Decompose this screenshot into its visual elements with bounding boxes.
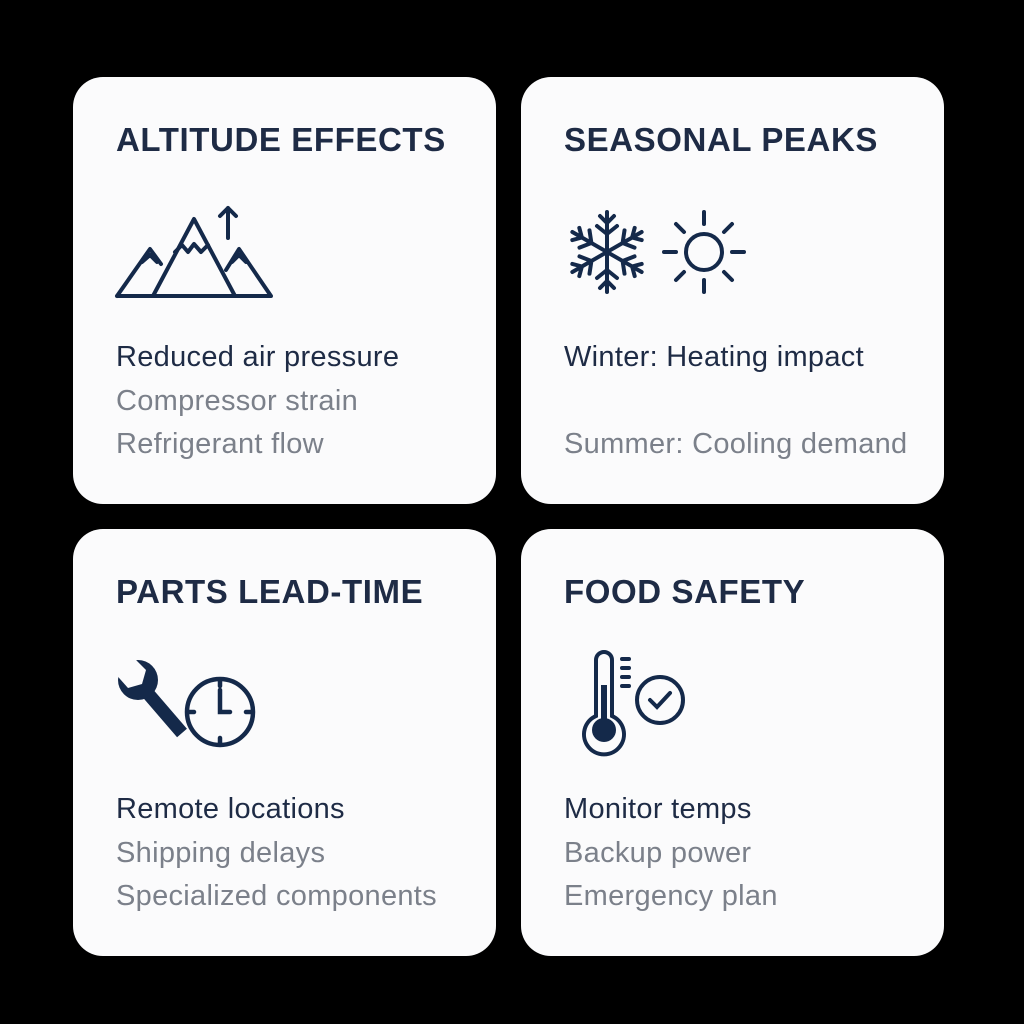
icon: wrench and clock — [118, 660, 256, 748]
panel: seasonal peaks — [521, 77, 944, 504]
panel: food safety: Emergency plan — [564, 880, 778, 912]
icon: snowflake and sun — [570, 210, 746, 294]
panel: parts lead-time: Specialized components — [116, 880, 437, 912]
heading: food: FOOD SAFETY — [564, 573, 805, 610]
panel: parts lead-time — [73, 529, 496, 956]
panel: food safety: Backup power — [564, 837, 751, 869]
icon: thermometer and check — [582, 650, 685, 756]
panel: altitude effects — [73, 77, 496, 504]
panel: seasonal peaks: Summer: Cooling demand — [564, 428, 907, 460]
panel: altitude effects: Compressor strain — [116, 385, 358, 417]
panel: altitude effects: Refrigerant flow — [116, 428, 324, 460]
heading: seasonal: SEASONAL PEAKS — [564, 121, 878, 158]
text: parts lines: Remote locations — [116, 793, 345, 825]
heading: parts: PARTS LEAD-TIME — [116, 573, 423, 610]
panel: food safety — [521, 529, 944, 956]
text: food lines: Monitor temps — [564, 793, 752, 825]
text: altitude lines: Reduced air pressure — [116, 341, 399, 373]
icon: mountains with arrow — [114, 206, 273, 298]
panel: parts lead-time: Shipping delays — [116, 837, 325, 869]
heading: altitude: ALTITUDE EFFECTS — [116, 121, 446, 158]
text: seasonal lines: Winter: Heating impact — [564, 341, 864, 373]
